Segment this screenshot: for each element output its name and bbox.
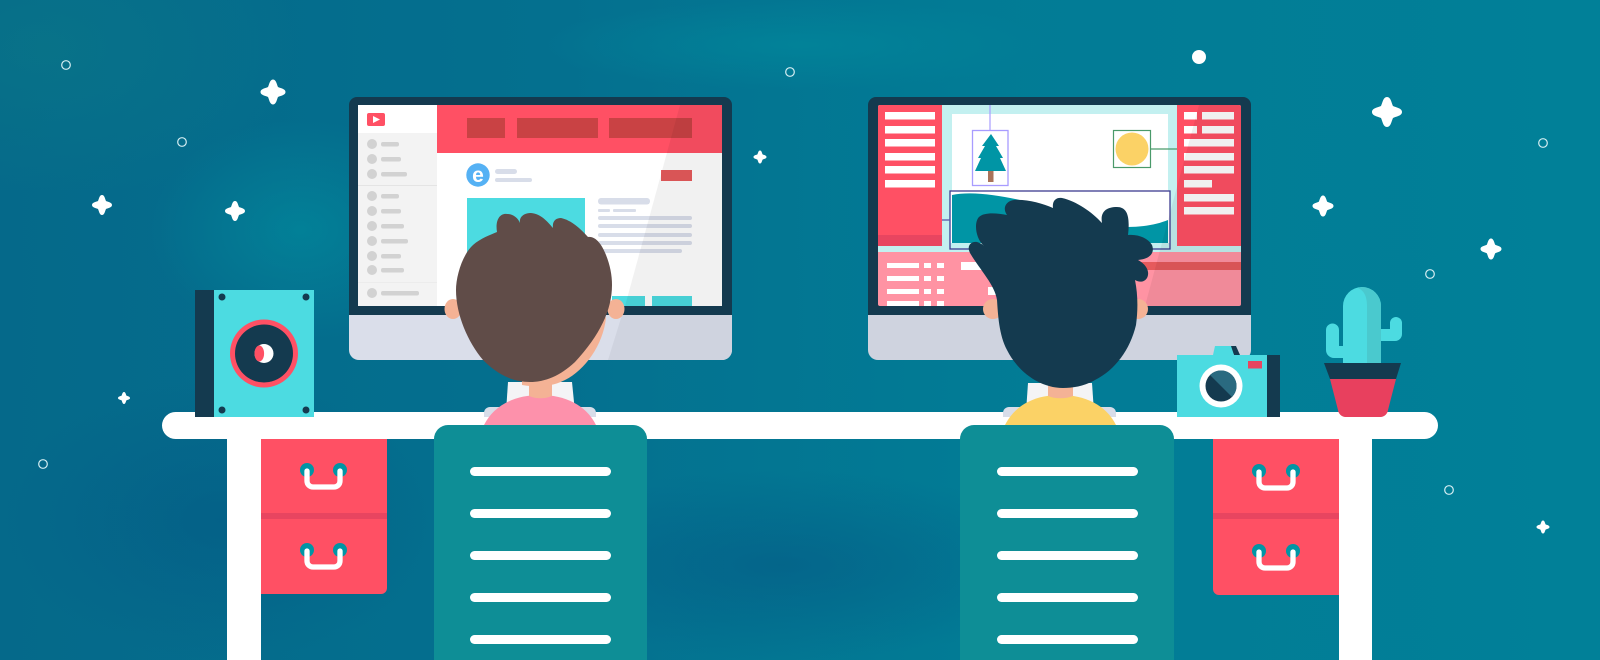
hair [456, 213, 612, 382]
right properties panel [1177, 105, 1241, 246]
header bar [437, 105, 722, 153]
ears [983, 299, 1148, 319]
person left [444, 213, 624, 425]
sidebar list [358, 139, 437, 298]
cactus plant [1324, 287, 1402, 417]
screen: design app [878, 105, 1241, 306]
chair right [960, 425, 1174, 660]
icon: play logo [367, 113, 385, 126]
video thumbnail [467, 198, 585, 252]
right drawers [1213, 439, 1339, 595]
sun layer [1114, 130, 1177, 168]
stars and dots [39, 50, 1550, 534]
desk [162, 412, 1438, 660]
monitor: design app [868, 97, 1251, 360]
monitor: video site [349, 97, 732, 360]
person right [969, 198, 1153, 425]
bottom timeline panel [878, 252, 1241, 306]
shirt [1005, 395, 1116, 425]
channel avatar: e [472, 164, 484, 187]
neck [1048, 380, 1073, 398]
channel avatar [466, 163, 532, 187]
screen: video site [358, 105, 722, 306]
tree layer [972, 105, 1008, 186]
chair left [434, 425, 647, 660]
icon: drawer handle lower [1252, 544, 1300, 568]
ears [444, 299, 624, 319]
icon: drawer handle [300, 463, 347, 487]
hair [969, 198, 1153, 388]
subscribe button [661, 170, 692, 181]
shirt [484, 395, 596, 425]
speaker [195, 290, 314, 417]
left drawers [261, 439, 387, 594]
description lines [598, 198, 692, 253]
icon: drawer handle lower [300, 543, 347, 567]
icon: drawer handle [1252, 464, 1300, 488]
camera [1177, 346, 1280, 417]
canvas [950, 114, 1170, 249]
monitor stand feet [484, 407, 1116, 417]
face [522, 300, 606, 386]
neck [529, 380, 552, 398]
left tool panel [878, 105, 942, 246]
monitor stands [506, 382, 1094, 412]
related thumbnails [612, 296, 692, 306]
